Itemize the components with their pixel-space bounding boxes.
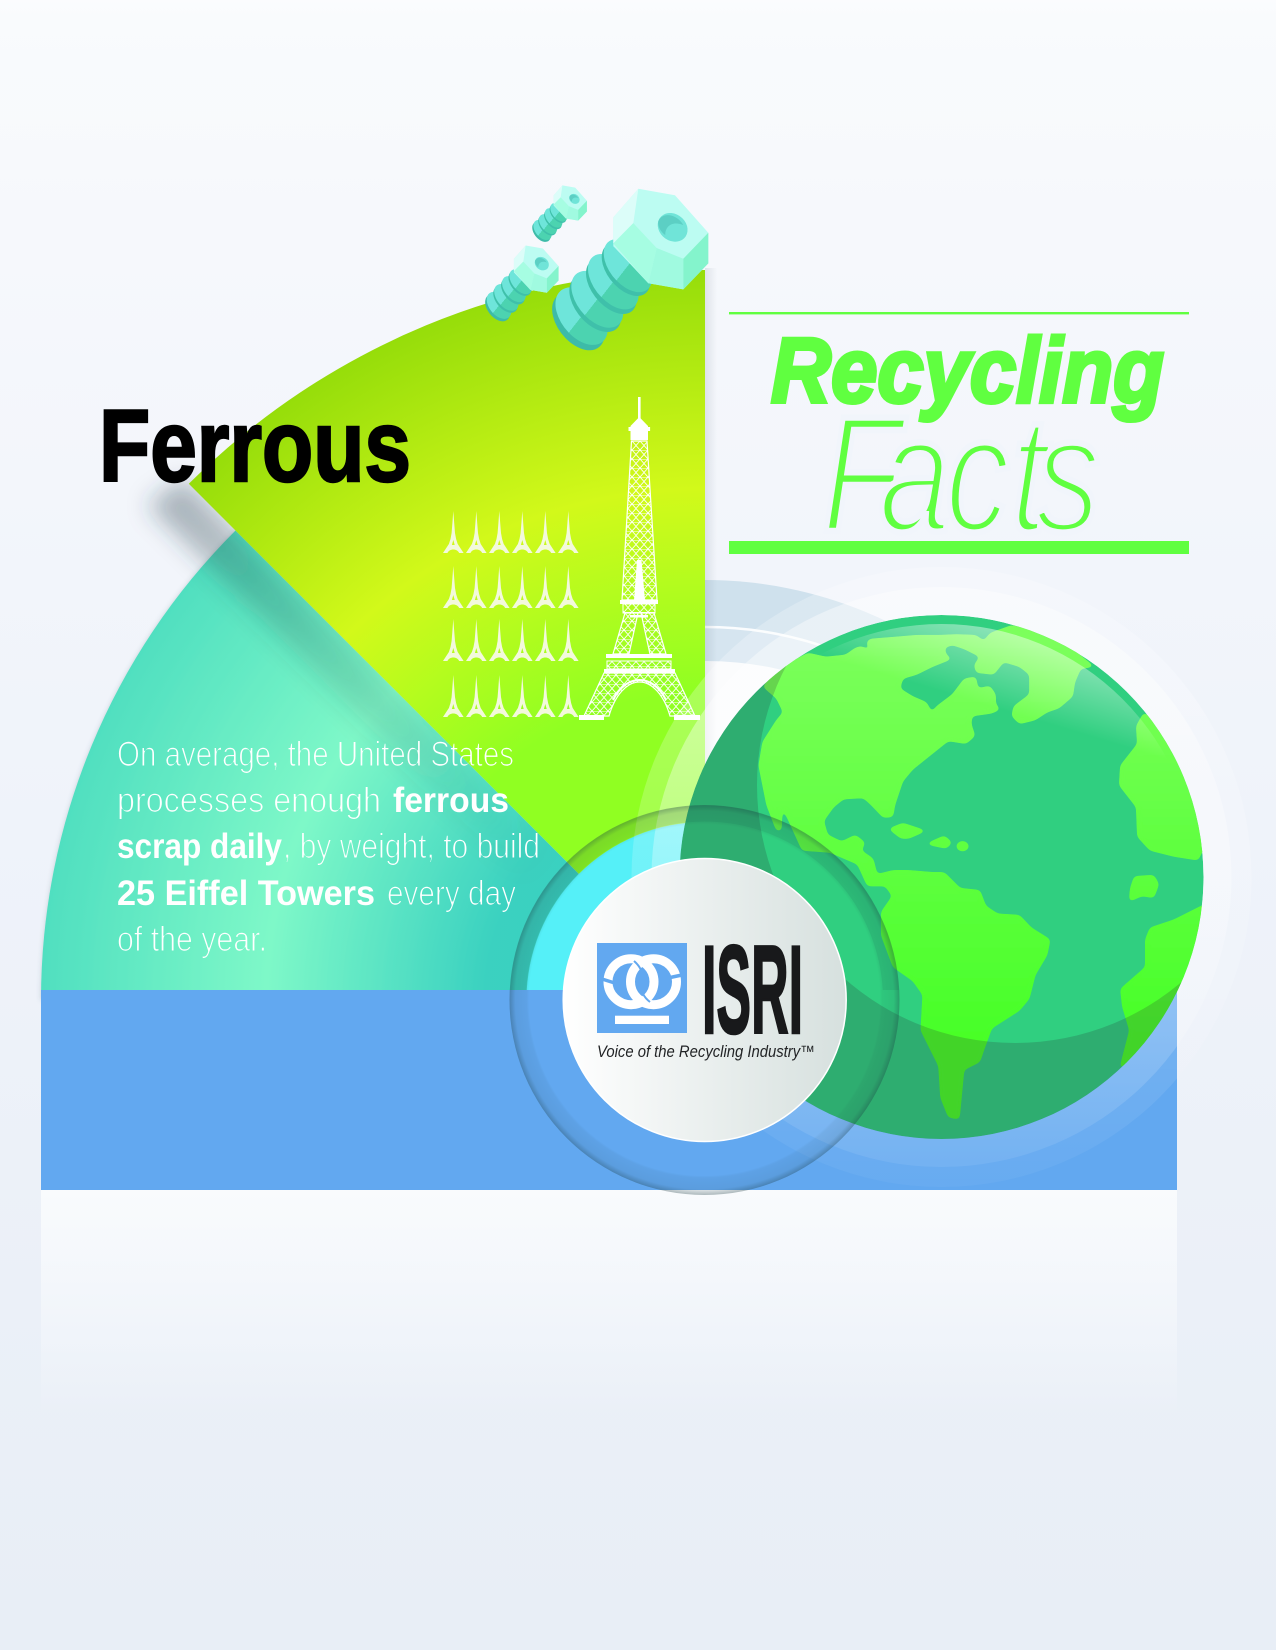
logo badge: ISRI: ISRI xyxy=(702,921,803,1060)
wedge right edge shadow xyxy=(705,268,717,868)
panel: blue band xyxy=(41,990,1177,1190)
icon: large bolt xyxy=(543,189,708,362)
text block: ferrous fact: ferrous xyxy=(393,781,509,820)
title: Recycling Facts: Facts xyxy=(822,383,1100,567)
text block: ferrous fact: scrap daily xyxy=(117,827,282,866)
panel: green wedge xyxy=(189,270,705,1000)
icon: ISRI logo mark xyxy=(597,943,687,1033)
title: Recycling Facts: Recycling xyxy=(771,320,1164,422)
icon: small bolt xyxy=(529,185,587,246)
text block: ferrous fact: 25 Eiffel Towers xyxy=(117,874,375,913)
icon: large Eiffel tower xyxy=(579,397,700,720)
logo badge: ISRI xyxy=(563,858,846,1142)
heading: Ferrous: Ferrous xyxy=(99,389,411,503)
title: Recycling Facts xyxy=(729,312,1189,567)
globe halo rings xyxy=(632,567,1252,1187)
icon: three bolts xyxy=(481,185,708,362)
icon: globe xyxy=(680,615,1204,1139)
text block: ferrous fact: of the year. xyxy=(117,920,267,959)
concentric background arcs xyxy=(705,580,886,676)
panel: teal quadrant xyxy=(41,530,705,1000)
land masses xyxy=(759,625,1209,1119)
text block: ferrous fact xyxy=(117,735,540,959)
lower white fade panel xyxy=(41,1190,1177,1420)
text block: ferrous fact: , by weight, to build xyxy=(283,827,540,866)
text block: ferrous fact: processes enough xyxy=(117,781,381,820)
text block: ferrous fact: every day xyxy=(387,874,516,913)
lens ring xyxy=(510,805,900,1195)
globe shaded crescent xyxy=(680,666,1182,1139)
text block: ferrous fact: On average, the United States xyxy=(117,735,514,774)
lens inner cyan disk xyxy=(526,823,686,990)
tagline: Voice of the Recycling Industry™ xyxy=(597,1043,815,1061)
globe top glare xyxy=(830,624,1161,750)
wedge drop shadow xyxy=(148,479,570,888)
white disc xyxy=(563,858,846,1142)
icon: small Eiffel towers grid xyxy=(443,511,579,717)
icon: medium bolt xyxy=(481,245,559,327)
